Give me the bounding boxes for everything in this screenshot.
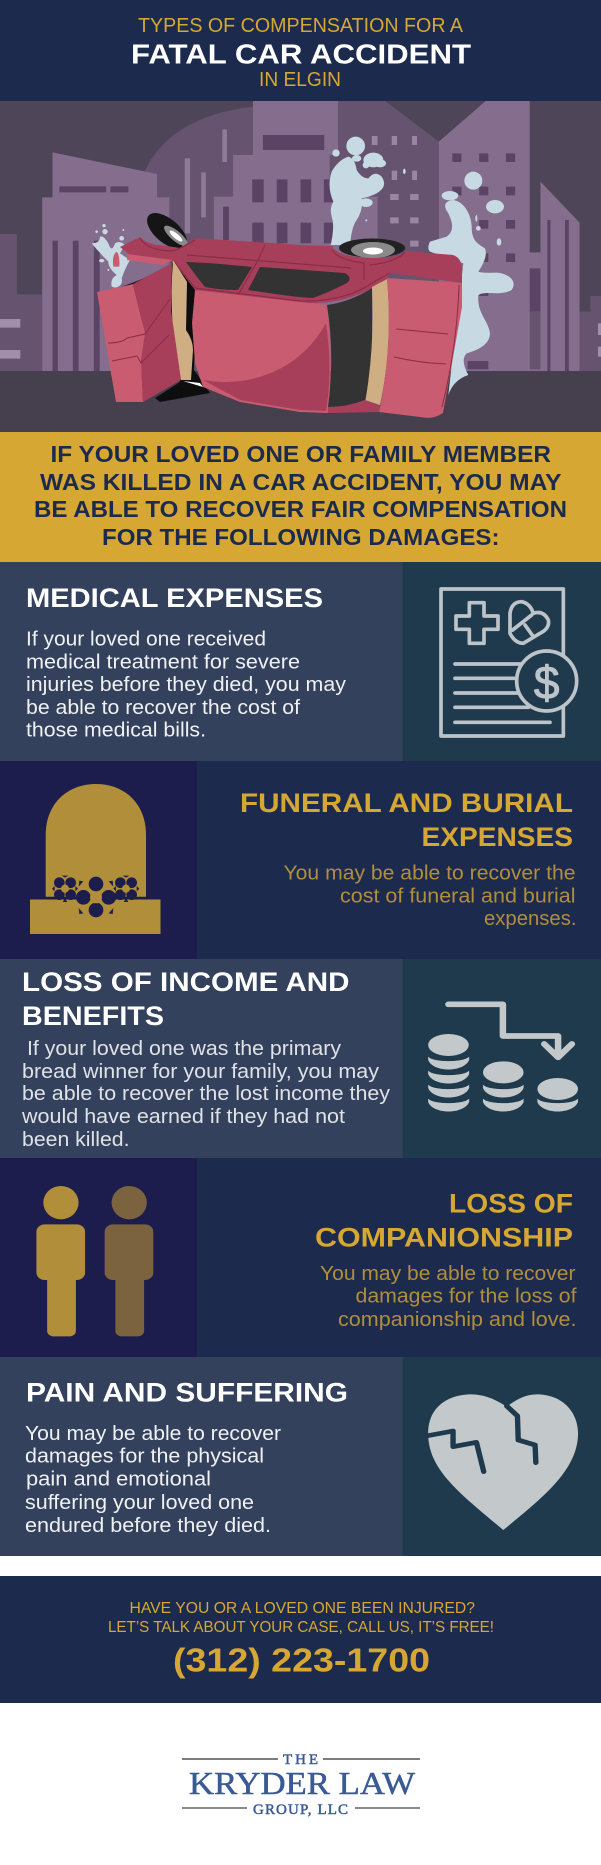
call to action band [0,1576,601,1703]
logo: The Kryder Law Group: GROUP, LLC [253,1802,348,1818]
body text [320,1263,577,1331]
call to action text: HAVE YOU OR A LOVED ONE BEEN INJURED? [130,1600,475,1617]
interior panel [327,288,372,407]
intro text: BE ABLE TO RECOVER FAIR COMPENSATION [34,496,567,522]
body text: injuries before they died, you may [26,674,346,696]
intro text: FOR THE FOLLOWING DAMAGES: [102,524,500,550]
body text: medical treatment for severe [26,652,300,674]
body text: If your loved one received [26,628,266,650]
door [192,290,331,413]
body text: been killed. [22,1129,130,1151]
call to action band: LET’S TALK ABOUT YOUR CASE, CALL US, IT’S FREE! [108,1619,494,1636]
body text: You may be able to recover [320,1263,576,1285]
icon: medical bill: $ [534,657,559,709]
body text: suffering your loved one [25,1492,254,1514]
body text: would have earned if they had not [21,1106,345,1128]
intro text [34,441,567,550]
heading: MEDICAL EXPENSES [26,583,323,613]
body text [284,862,576,930]
body text: pain and emotional [26,1468,211,1490]
body text: cost of funeral and burial [340,886,576,908]
body text: endured before they died. [25,1515,271,1537]
body text: If your loved one was the primary [27,1038,341,1060]
body text: damages for the physical [25,1446,264,1468]
body text [26,628,346,742]
heading: FUNERAL AND BURIAL [240,788,573,818]
body text: You may be able to recover the [284,862,576,884]
logo: The Kryder Law Group: KRYDER LAW [189,1765,416,1801]
panel: loss of companionship: COMPANIONSHIP [315,1222,573,1252]
front pillar [172,260,193,380]
title line 1: TYPES OF COMPENSATION FOR A [138,15,464,37]
heading: LOSS OF [449,1188,573,1218]
body text: You may be able to recover [25,1423,281,1445]
panel: pain and suffering [0,1357,601,1556]
body text: be able to recover the cost of [26,697,300,719]
small engine smoke [92,224,130,288]
crumpled hood [97,284,145,402]
title line 3: IN ELGIN [259,69,341,91]
icon: coins and down arrow [428,1004,578,1111]
body text: bread winner for your family, you may [22,1061,379,1083]
logo: The Kryder Law Group [182,1752,420,1818]
header banner [0,0,601,101]
body text: be able to recover the lost income they [22,1083,390,1105]
title main: FATAL CAR ACCIDENT [131,38,471,70]
panel: medical expenses [0,562,601,761]
city skyline [0,101,601,372]
rear panel [379,278,462,418]
windows [186,262,350,298]
icon: broken heart [426,1394,578,1530]
panel: loss of income and benefits: BENEFITS [22,1001,164,1031]
intro text: IF YOUR LOVED ONE OR FAMILY MEMBER [50,441,551,467]
panel: funeral and burial expenses [0,761,601,959]
body text: damages for the loss of [356,1286,577,1308]
illustration: overturned car in city [0,101,601,433]
intro banner [0,432,601,562]
heading: PAIN AND SUFFERING [26,1378,348,1408]
car [97,206,462,418]
road [0,371,601,432]
body text [25,1423,281,1537]
icon: tombstone [30,784,160,934]
icon: two people [36,1186,153,1336]
logo: The Kryder Law Group: THE [283,1752,318,1768]
panel: funeral and burial expenses: EXPENSES [422,822,573,852]
body text: those medical bills. [26,720,206,742]
icon: medical bill [441,589,577,736]
heading: LOSS OF INCOME AND [22,967,350,997]
smoke plumes [330,137,514,395]
wheels [141,206,405,258]
phone number: (312) 223-1700 [173,1642,430,1678]
panel: loss of companionship [0,1158,601,1357]
intro text: WAS KILLED IN A CAR ACCIDENT, YOU MAY [40,469,562,495]
body text [21,1038,390,1151]
flowers [52,876,139,917]
car body top [120,237,462,303]
body text: expenses. [484,908,576,930]
panel: loss of income and benefits [0,959,601,1158]
body text: companionship and love. [338,1309,576,1331]
